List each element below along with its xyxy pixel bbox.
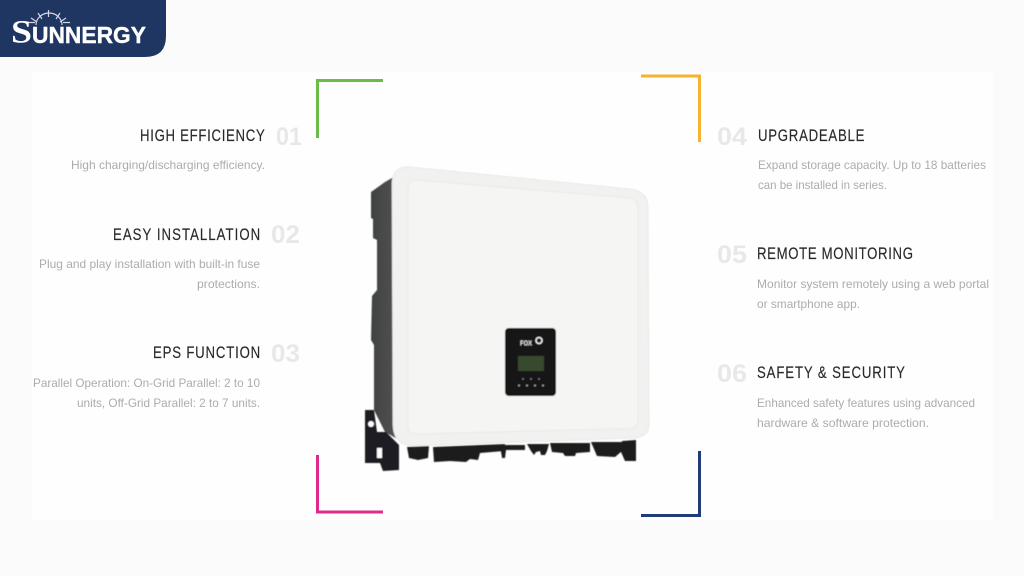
description: Monitor system remotely using a web portal (757, 277, 989, 291)
description: High charging/discharging efficiency. (71, 158, 265, 172)
front cover (392, 167, 649, 446)
icon: sun rays (28, 10, 70, 25)
front panel (408, 180, 638, 434)
number: 04 (717, 123, 747, 151)
number: 03 (271, 340, 300, 368)
feature 03 (33, 340, 300, 410)
description (757, 277, 989, 311)
heading: EPS FUNCTION (153, 344, 260, 362)
feature 02 (39, 221, 300, 291)
number: 05 (717, 241, 747, 269)
brand label: FOX (520, 340, 532, 348)
foot cut-outs (368, 421, 382, 458)
heading: SAFETY & SECURITY (757, 364, 905, 382)
logo wordmark: UNNERGY (32, 22, 146, 48)
LCD screen (518, 356, 544, 371)
bracket: pink (318, 455, 383, 512)
number: 06 (717, 360, 747, 388)
feature 01 (71, 123, 302, 172)
description: hardware & software protection. (757, 416, 929, 430)
description: units, Off-Grid Parallel: 2 to 7 units. (77, 396, 260, 410)
bracket: orange (641, 76, 700, 142)
mounting foot left (365, 410, 399, 471)
inverter illustration (365, 167, 649, 471)
brand ring icon (536, 338, 542, 344)
bracket: navy (641, 451, 700, 516)
connectors (407, 440, 636, 462)
number: 02 (271, 221, 300, 249)
logo badge (0, 0, 166, 57)
dark side casing (371, 171, 410, 446)
feature 04 (717, 123, 986, 192)
description (758, 158, 986, 192)
number: 01 (276, 123, 302, 151)
display module (505, 328, 556, 396)
description (39, 257, 260, 291)
status lights and buttons (518, 378, 544, 386)
bracket: green (318, 80, 383, 138)
description: or smartphone app. (757, 297, 860, 311)
logo wordmark (11, 14, 146, 50)
description: Parallel Operation: On-Grid Parallel: 2 to 10 (33, 376, 260, 390)
description (757, 396, 975, 430)
heading: EASY INSTALLATION (113, 226, 260, 244)
description: Plug and play installation with built-in fuse (39, 257, 260, 271)
heading: HIGH EFFICIENCY (140, 127, 265, 145)
content panel (32, 72, 993, 520)
description: Enhanced safety features using advanced (757, 396, 975, 410)
description (33, 376, 260, 410)
heading: REMOTE MONITORING (757, 245, 913, 263)
description: Expand storage capacity. Up to 18 batteries (758, 158, 986, 172)
heading: UPGRADEABLE (758, 127, 864, 145)
feature 05 (717, 241, 989, 311)
feature 06 (717, 360, 975, 430)
description: protections. (197, 277, 260, 291)
logo wordmark: S (11, 14, 32, 50)
description: can be installed in series. (758, 178, 887, 192)
